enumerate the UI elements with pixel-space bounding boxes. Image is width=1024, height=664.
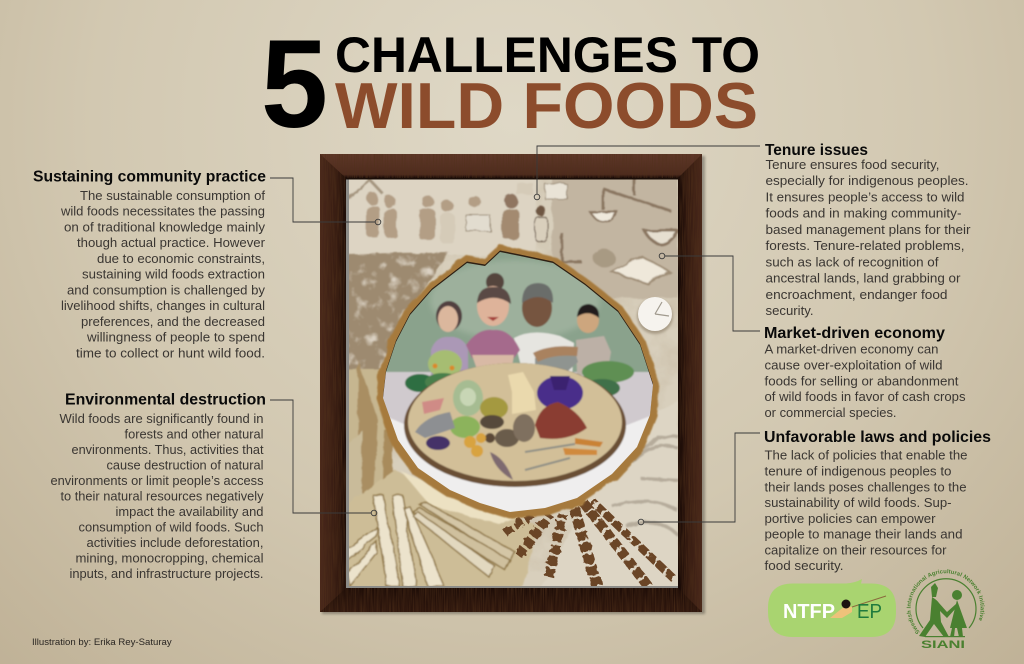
heading: Environmental destruction [65,392,266,408]
connector: market-driven economy [659,253,760,331]
body: willingness of people to spend [86,330,265,344]
logo wordmark: SIANI [921,639,965,651]
body: encroachment, endanger food [766,287,948,302]
body: capitalize on their resources for [764,542,947,557]
body: A market-driven economy can [764,342,938,357]
body: consumption of wild foods. Such [78,520,264,534]
father [514,283,578,378]
logo: NTFP-EP: NTFP [783,601,835,623]
body: Tenure ensures food security, [766,157,940,172]
body: The lack of policies that enable the [764,448,968,463]
painting [346,175,678,590]
body: cause destruction of natural [106,458,264,472]
body: based management plans for their [766,222,971,237]
body: forests. Tenure-related problems, [766,238,964,253]
framed illustration [320,154,705,614]
logo: SIANI [906,569,985,651]
body: Wild foods are significantly found in [60,411,264,426]
girl [431,301,468,375]
body: time to collect or hunt wild food. [76,345,265,360]
body: foods for selling or abandonment [764,373,959,388]
title [261,15,760,154]
heading: Market-driven economy [764,325,945,342]
body: preferences, and the decreased [81,314,265,329]
body: their lands poses challenges to the [764,479,966,494]
body: mining, monocropping, chemical [76,550,264,566]
logo ring [916,579,976,628]
body: due to economic constraints, [97,251,265,266]
sketched community and market scene [346,175,678,298]
connector: unfavorable laws and policies [638,433,760,525]
field at left and trees [346,252,678,590]
body: portive policies can empower [764,511,936,526]
body: inputs, and infrastructure projects. [70,566,264,581]
body: wild foods necessitates the passing [60,204,265,219]
burnt hole edge [376,245,660,519]
heading: Unfavorable laws and policies [764,429,991,446]
logo: NTFP-EP [768,579,896,637]
ploughed furrows [505,501,673,586]
body: sustainability of wild foods. Sup- [764,495,952,510]
bowl body [404,363,626,487]
title numeral 5: 5 [261,15,328,154]
body: though actual practice. However [77,235,266,250]
text block: market-driven economy [764,325,966,420]
body [764,448,968,573]
body: livelihood shifts, changes in cultural [61,298,265,313]
logo: NTFP-EP: EP [857,601,882,623]
connector: tenure issues [534,146,760,200]
body: forests and other natural [124,426,264,442]
clock [637,297,673,334]
greens [405,350,634,397]
text block: environmental destruction [50,392,266,581]
scales, book [602,175,672,212]
body: ancestral lands, land grabbing or [766,271,961,286]
text block: tenure issues [765,142,971,318]
body: tenure of indigenous peoples to [764,464,952,478]
body [764,342,966,420]
body: cause over-exploitation of wild [764,358,942,372]
illustration credit: Illustration by: Erika Rey-Saturay [32,637,172,648]
body: activities include deforestation, [86,535,264,550]
body: The sustainable consumption of [80,188,265,203]
connector: sustaining community practice [270,178,381,225]
land around the hole [540,400,678,590]
scene through the hole [383,252,653,512]
logo figures [919,583,967,637]
family [431,273,611,378]
felled logs [347,495,515,587]
mother [466,273,520,378]
body: impact the availability and [116,504,264,519]
body [60,188,266,360]
body: foods and in making community- [766,206,962,221]
body: such as lack of recognition of [766,254,939,269]
heading: Sustaining community practice [33,168,266,186]
body: food security. [764,558,844,573]
body: environments. Thus, activities that [72,442,264,457]
body [766,157,971,318]
frame [320,154,705,614]
text block: unfavorable laws and policies [764,429,991,573]
body: on of traditional knowledge mainly [64,220,266,234]
body: sustaining wild foods extraction [82,267,265,282]
connector: environmental destruction [270,400,377,516]
body: It ensures people’s access to wild [766,189,964,204]
bowl of wild foods [404,350,634,487]
title line 1: CHALLENGES TO [335,27,760,83]
logo ring text: Swedish International Agricultural Network Initiative [906,569,985,634]
heading: Tenure issues [765,142,868,159]
title line 2: WILD FOODS [335,70,758,142]
body: environments or limit people’s access [50,473,264,488]
body: security. [766,303,814,318]
body: people to manage their lands and [764,527,962,542]
body: especially for indigenous peoples. [766,173,968,188]
body: and consumption is challenged by [67,282,265,297]
body [50,411,264,581]
body: of wild foods in favor of cash crops [764,389,966,404]
hunter figure with blowpipe [830,596,886,618]
body: to their natural resources negatively [60,488,264,504]
boy [576,304,611,375]
produce [508,372,536,414]
body: or commercial species. [764,405,896,420]
text block: sustaining community practice [33,168,266,360]
